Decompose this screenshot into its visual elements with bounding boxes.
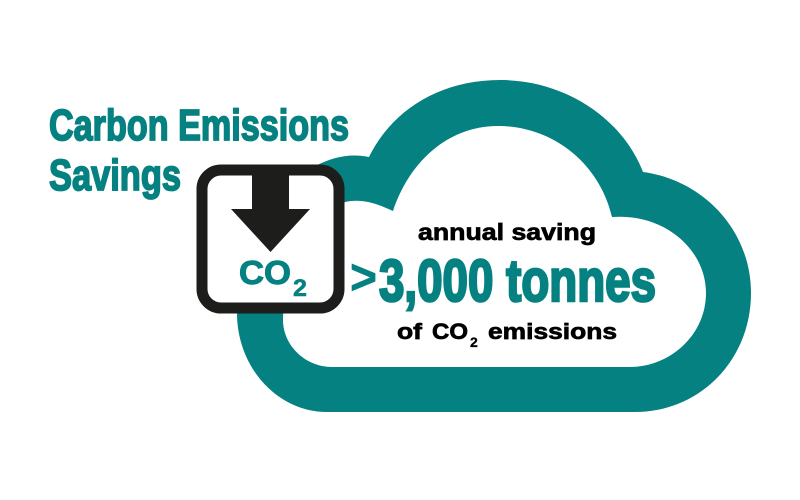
text: tonnes figure: 3,000 tonnes <box>379 248 656 314</box>
text: of CO2 emissions: emissions <box>488 319 617 344</box>
text: of CO2 emissions: of <box>397 319 423 344</box>
text: of CO2 emissions <box>397 319 617 350</box>
text: tonnes figure: > <box>350 249 377 305</box>
heading: Savings <box>49 151 181 200</box>
heading: Carbon Emissions <box>49 101 349 150</box>
text: of CO2 emissions: 2 <box>470 334 478 350</box>
text: of CO2 emissions: CO <box>432 319 468 344</box>
icon: CO2 down arrow box: CO <box>239 254 291 291</box>
text: annual saving: annual saving <box>418 219 596 245</box>
heading <box>49 101 349 200</box>
icon: CO2 down arrow box: 2 <box>293 275 307 302</box>
cloud outline <box>237 80 751 412</box>
icon: CO2 down arrow box <box>202 170 339 308</box>
